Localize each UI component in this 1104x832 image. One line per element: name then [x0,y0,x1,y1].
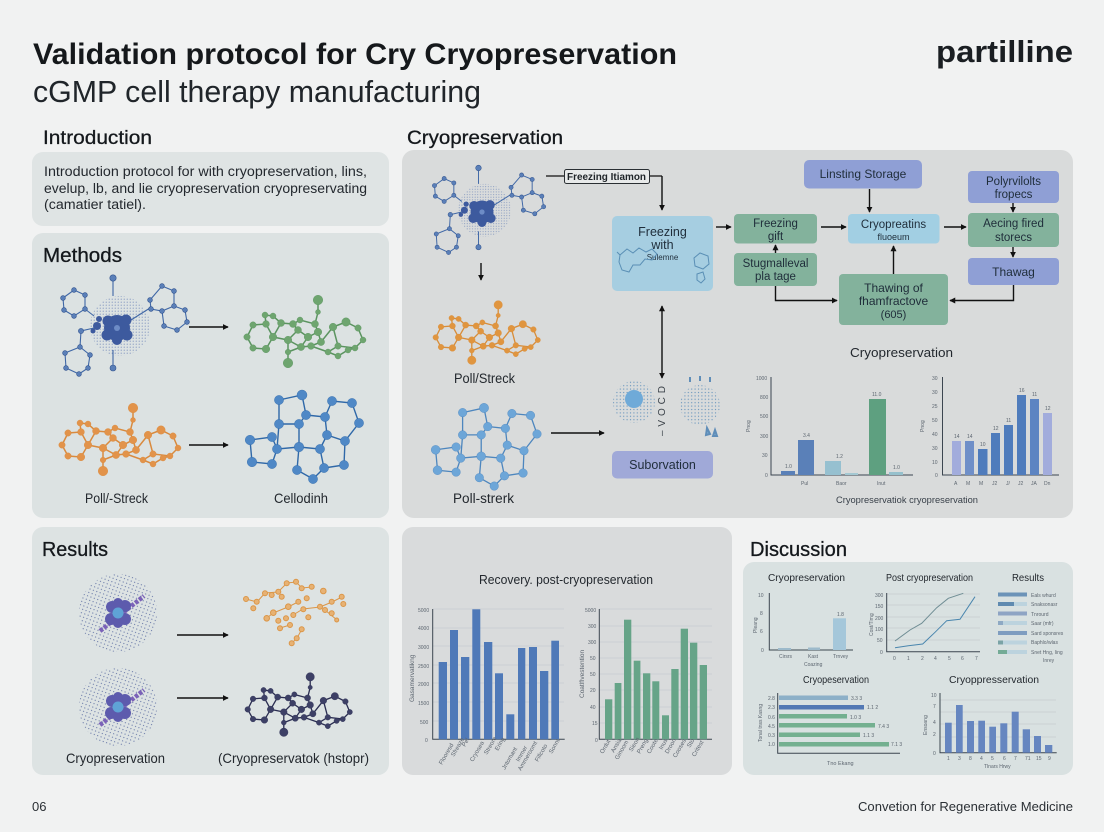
chart caption: Cryopreservatiok cryopreservation [836,495,978,506]
results list: Saar (mfr) [1031,621,1054,627]
bar chart: blue recovery: Fillcoto [535,743,550,763]
bar chart: left: 500 [760,414,769,420]
bar chart: right: 50 [932,418,938,424]
vertical label: – V O C D [657,386,668,436]
bar chart: left: Pnog [746,420,752,432]
bar chart: left: 1.2 [836,454,843,460]
bar chart: left: Pul [801,481,808,487]
bar chart: blue recovery: Pel [462,737,471,748]
mini chart title: Cryoppresservation [949,674,1039,686]
box: thawing [839,274,948,325]
results list: Snaksonasr [1031,602,1058,608]
bar chart: left: 800 [760,395,769,401]
bar chart: green recovery: Cooses [673,738,688,759]
chart title: Cryopreservation [850,346,953,360]
panel: discussion [743,562,1073,775]
vertical bar chart: 10 [931,693,937,699]
bar chart: right: Pnog [920,420,926,432]
bar chart: right: 16 [1019,388,1025,394]
bar chart: left: Baor [836,481,847,487]
arrow: stugmalleval to thawing [776,286,837,300]
page number: 06 [32,799,46,814]
bar chart: green recovery: 50 [590,672,596,678]
bar chart: green recovery: Preng [637,738,650,755]
bar chart: blue recovery: 1500 [418,701,429,707]
mini bar chart [753,593,853,668]
bar chart: right: 10 [980,442,986,448]
text block: introduction: evelup, lb, and lie cryopreservation cryopreservating [44,181,367,196]
arrow: callout to freezing box [661,176,663,210]
panel: methods [32,233,389,518]
bar chart: left: 11.0 [872,392,882,398]
arrow: frozen gift to cryopreserve [821,226,846,228]
box: polyvitolits [968,171,1059,203]
box: freezing with: with [650,238,674,252]
bar chart: blue recovery: 2000 [418,682,429,688]
icon: orange molecule [433,301,540,365]
bar chart: blue recovery: Gasamervatikng [409,654,416,702]
label: cryopreservatok: (Cryopreservatok (hstopr) [218,750,369,766]
panel: recovery charts [402,527,732,775]
arrow: freezing to cells [661,306,663,378]
title: Validation protocol for Cry Cryopreservation [33,38,677,71]
horizontal bar chart [758,693,902,767]
line chart: 300 [875,593,884,599]
line chart: 200 [875,616,884,622]
bar chart: green recovery [579,608,712,761]
results list: Baphlo/wlas [1031,640,1058,646]
horizontal bar chart: 1.0 [768,742,775,748]
box: linking storage: Linsting Storage [820,167,907,181]
footer credit: Convetion for Regenerative Medicine [858,799,1073,814]
panel: introduction [32,152,389,226]
icon: fragmented orange molecule [244,579,346,646]
arrow: freezing to frozen gift [716,226,731,228]
label: cellodinh: Cellodinh [274,490,328,506]
icon: cell right [680,376,720,436]
results list [998,592,1064,664]
bar chart: blue recovery: 0 [425,738,428,744]
bar chart: blue recovery: Jntomant [502,746,519,771]
icon: light blue molecule [431,403,541,490]
mini bar chart: Coazing [804,662,823,668]
box: freezing with: Sulemne [647,253,679,262]
mini bar chart: 6 [760,629,763,635]
vertical bar chart: 6 [1003,756,1006,762]
bar chart: right: 14 [967,434,973,440]
mini chart title: Post cryopreservation [886,572,973,584]
horizontal bar chart: 0.6 [768,715,775,721]
results list: Eals whurd [1031,593,1056,599]
bar chart: right: M [979,481,983,487]
text block: introduction: (camatier tatiel). [44,197,146,212]
arrow: cryopreserve to ageing [944,226,966,228]
vertical bar chart: 8 [969,756,972,762]
bar chart: green recovery: 300 [588,624,597,630]
bar chart: blue recovery: Ammeroomt [518,740,539,772]
vertical bar chart: 5 [991,756,994,762]
box: cryopreserve: fluoeum [877,232,910,242]
bar chart: left: 300 [760,434,769,440]
arrow: polyvitolits to ageing [1012,203,1014,212]
mini bar chart: 8 [760,611,763,617]
bar chart: blue recovery: 2500 [418,664,429,670]
bar chart: right: Dn [1044,481,1051,487]
box: ageing: storecs [995,232,1032,244]
line chart: Cost/Timg [869,613,875,636]
arrow: methods bottom [189,444,228,446]
line chart: 100 [875,627,884,633]
mini bar chart: Kast [808,654,819,660]
line chart: 7 [975,656,978,662]
mini bar chart: Trnvey [833,654,849,660]
mini bar chart: Pleang [753,617,759,633]
horizontal bar chart: Tonal tnss Kasng [758,704,764,742]
horizontal bar chart: Tno Ekang [827,761,854,767]
bar chart: green recovery: 50 [590,656,596,662]
label: poll streck: Poll/Streck [454,371,515,386]
horizontal bar chart: 0.3 [768,733,775,739]
bar chart: blue recovery: Sfreaze [451,737,466,758]
horizontal bar chart: 7.1 3 [891,742,902,748]
line chart: 0 [880,650,883,656]
icon: cell left [613,381,655,423]
arrow: to cells [551,432,604,434]
arrow: linking to cryopreserve [868,189,870,212]
results list: Snet Hng, Iing [1031,650,1063,656]
title: cGMP cell therapy manufacturing [33,74,481,109]
logo: partilline [936,34,1073,69]
bar chart: green recovery: Inus [659,738,669,751]
vertical bar chart: Ensoang [923,715,929,735]
vertical bar chart: 0 [933,751,936,757]
icon: cell with molecules [432,165,546,255]
mini bar chart: Cirsrs [779,654,793,660]
box: ageing [968,213,1059,247]
box: thawing: (605) [881,309,906,321]
bar chart: right: A [954,481,958,487]
bar chart: green recovery: Ordut [600,739,612,755]
icon: orange molecule [59,403,181,476]
vertical bar chart [923,693,1057,770]
arrow: down to orange molecule [480,263,482,280]
icon: cell with molecules [61,275,189,376]
bar chart: right: J2 [992,481,998,487]
box: linking storage [804,160,922,188]
horizontal bar chart: 1.1 3 [863,733,874,739]
box: polyvitolits: Polyrvilolts [986,176,1041,188]
line chart: 50 [877,638,883,644]
icon: dark molecule [245,673,352,737]
box: frozen gift: gift [768,231,784,243]
arrow: stugmalleval up [774,245,776,253]
mini bar chart: 10 [758,593,764,599]
bar chart: right: JA [1031,481,1038,487]
title [33,38,677,109]
bar chart: green recovery: 15 [592,721,598,727]
icon: cell top [79,574,157,652]
vertical bar chart: 15 [1036,756,1042,762]
box: thawing: fhamfractove [859,294,929,308]
horizontal bar chart: 7.4 3 [878,724,889,730]
chart title: Recovery. post-cryopreservation [479,573,653,587]
line chart: 150 [875,604,884,610]
text block: introduction [44,164,367,212]
heading: results: Results [42,539,108,561]
mini bar chart: 1.8 [837,612,844,618]
bar chart: left: 1.0 [785,464,792,470]
box: freezing with [612,216,713,291]
bar chart: left: 3.4 [803,433,810,439]
vertical bar chart: 4 [933,720,936,726]
vertical bar chart: 1 [947,756,950,762]
bar chart: green recovery: 300 [588,640,597,646]
bar chart: right: 30 [932,446,938,452]
panel: cryopreservation [402,150,1073,518]
bar chart: green recovery: Sieon [629,737,641,753]
label: cryopreservation: Cryopreservation [66,750,165,766]
bar chart: right: 40 [932,432,938,438]
bar chart: green recovery: Critest [692,740,706,758]
arrow: methods top [189,326,228,328]
text block: introduction: Introduction protocol for with cryopreservation, lins, [44,164,367,179]
bar chart: left: 1.0 [893,465,900,471]
bar chart: green recovery: Ginoom [615,740,630,761]
bar chart: right: 10 [932,460,938,466]
bar chart: right: J2 [1018,481,1024,487]
mini chart title: Cryopreservation [768,572,845,584]
vertical bar chart: 4 [980,756,983,762]
box: cryopreserve [848,214,940,244]
bar chart: green recovery: 5000 [585,608,596,614]
box: thawing: Thawing of [864,281,924,295]
box: thawag [968,258,1059,285]
mini chart title: Results [1012,572,1044,584]
bar chart: green recovery: Droon [665,738,678,755]
arrow: thawing up [892,246,894,274]
bar chart: green recovery: Ansia [611,737,624,754]
box: frozen gift: Freezing [753,218,798,230]
bar chart: blue recovery: 500 [420,720,429,726]
bar chart: blue recovery: 4000 [418,626,429,632]
bar chart: right: 11 [1006,418,1011,424]
mini chart title: Cryopeservation [803,674,869,686]
heading: introduction: Introduction [43,127,152,149]
box: survivation: Suborvation [629,458,696,472]
horizontal bar chart: 3.3 3 [851,696,862,702]
results list: Tnrourd [1031,612,1049,618]
results list: Inrey [1043,658,1055,664]
bar chart: blue recovery [409,608,565,772]
bar chart: green recovery: Sto [687,738,697,749]
heading: cryopreservation: Cryopreservation [407,127,563,149]
bar chart: left: 1000 [756,376,767,382]
vertical bar chart: Tlnars Hrwy [984,764,1011,770]
icon: green molecule [244,295,366,368]
horizontal bar chart: 2.8 [768,696,775,702]
bar chart: right: 25 [932,404,938,410]
heading: methods: Methods [43,245,122,267]
mini bar chart: 0 [761,648,764,654]
vertical bar chart: 3 [958,756,961,762]
box: frozen gift [734,214,817,244]
line chart: 6 [961,656,964,662]
vertical bar chart: 2 [933,732,936,738]
bar chart: right: 0 [935,473,938,479]
icon: cell bottom [79,668,157,746]
line chart [869,593,980,662]
line chart: 1 [907,656,910,662]
line chart: 5 [948,656,951,662]
box: thawag: Thawag [992,265,1035,279]
bar chart: green recovery: Coote [647,738,660,755]
bar chart: blue recovery: Sonnt [549,738,562,755]
arrow: ageing to thawing [1012,247,1014,257]
arrow: results top [177,634,228,636]
panel: results [32,527,389,775]
horizontal bar chart: 4.5 [768,724,775,730]
bar chart: blue recovery: Ering [495,737,507,752]
line chart: 4 [934,656,937,662]
bar chart: blue recovery: Streore [484,735,499,756]
bar chart: blue recovery: Immer [516,745,529,763]
bar chart: blue recovery: Flooresd [439,743,455,766]
bar chart: right: J/ [1006,481,1010,487]
bar chart: right: 14 [954,434,960,440]
horizontal bar chart: 1.0 3 [850,715,861,721]
bar chart: left: 30 [762,453,768,459]
vertical bar chart: 71 [1025,756,1031,762]
bar chart: right: M [966,481,970,487]
bar chart: left [746,376,913,487]
arrow: thawag to thawing [950,285,1014,300]
bar chart: green recovery: 0 [595,738,598,744]
bar chart: blue recovery: 3000 [418,645,429,651]
bar chart: right: 12 [1045,406,1051,412]
bar chart: right [920,376,1059,487]
bar chart: blue recovery: Cryosea [470,740,486,763]
vertical bar chart: 7 [933,704,936,710]
box: cryopreserve: Cryopreatins [861,219,926,231]
box: survivation [612,451,713,478]
vertical bar chart: 9 [1048,756,1051,762]
horizontal bar chart: 2.3 [768,705,775,711]
bar chart: left: Inut [877,481,886,487]
box: freezing with: Freezing [638,225,687,239]
line chart: 0 [893,656,896,662]
bar chart: green recovery: 40 [590,705,596,711]
box: stugmalleval: pla tage [755,271,796,283]
bar chart: right: 12 [993,426,999,432]
bar chart: blue recovery: 5000 [418,608,429,614]
icon: blue molecule [245,390,364,484]
box: ageing: Aecing fired [983,218,1044,230]
heading: discussion: Discussion [750,539,847,561]
results list: Sard sponsres [1031,631,1064,637]
callout: freezing [546,170,662,184]
bar chart: right: 30 [932,376,938,382]
callout: freezing: Freezing Itiamon [567,172,646,183]
bar chart: right: 30 [932,390,938,396]
horizontal bar chart: 1.1 2 [867,705,878,711]
box: stugmalleval: Stugmalleval [743,258,808,270]
box: polyvitolits: fropecs [995,189,1033,201]
bar chart: green recovery: Coatlflvestention [579,650,586,698]
vertical bar chart: 7 [1014,756,1017,762]
bar chart: green recovery: 20 [590,688,596,694]
line chart: 2 [921,656,924,662]
box: stugmalleval [734,253,817,286]
bar chart: left: 0 [765,473,768,479]
bar chart: right: 11 [1032,392,1037,398]
label: poll-streck: Poll/-Streck [85,490,149,506]
label: poll strerk: Poll-strerk [453,491,514,506]
arrow: results bottom [177,697,228,699]
